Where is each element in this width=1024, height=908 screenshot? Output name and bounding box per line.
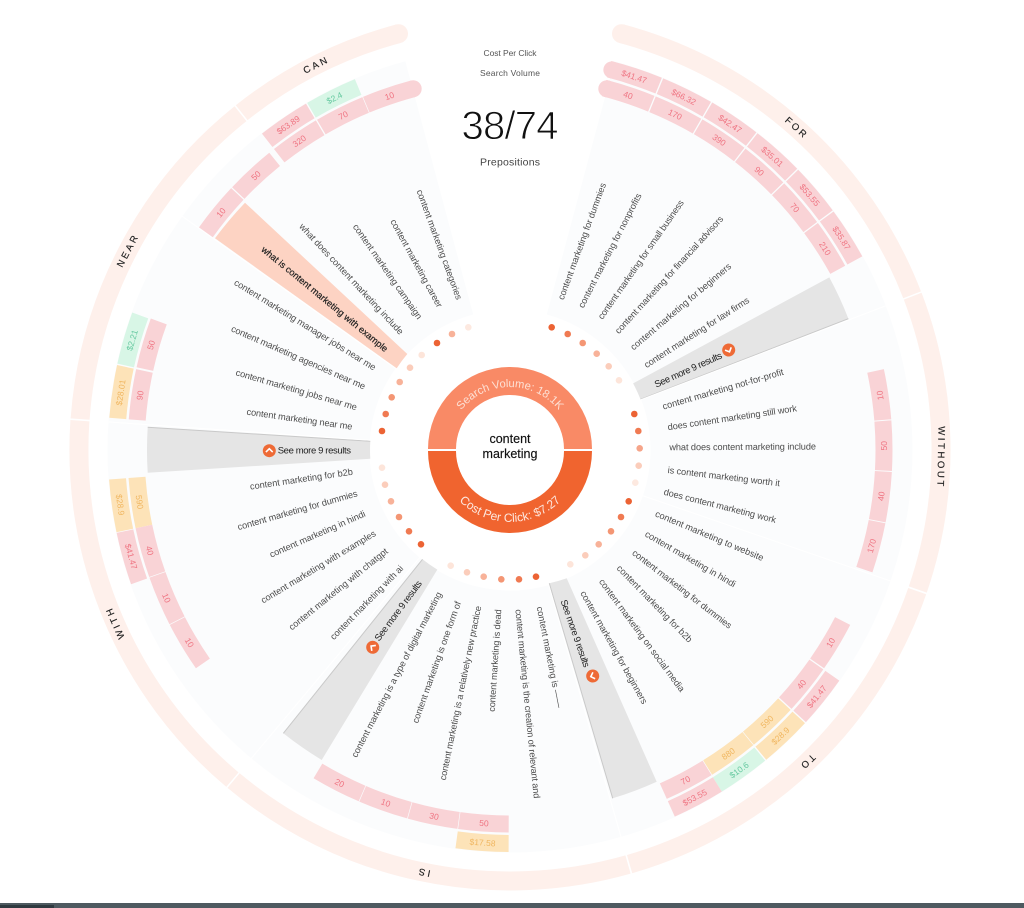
see more wedge: FOR [633,277,848,399]
keyword list: FOR: content marketing for law firms [642,295,751,370]
keyword list: IS: content marketing is —— [535,606,565,710]
ring label: WITHOUT: WITHOUT [934,426,946,489]
cost per click cells: TO: $28.9 [769,725,792,747]
keyword list: WITHOUT: is content marketing worth it [667,465,781,488]
cost per click cells: WITH: $28.9 [114,494,127,516]
keyword list: TO [578,509,765,706]
search volume cells: WITHOUT: 40 [876,491,887,502]
search volume cells: WITHOUT: 50 [879,441,889,451]
keyword list: NEAR: content marketing jobs near me [235,367,358,412]
search volume cells: CAN: 320 [291,133,308,149]
cost per click cell: IS [455,831,510,853]
keyword list: WITH: content marketing in hindi [268,509,367,560]
search volume cells: TO: 70 [679,773,692,787]
header: legend labels [480,48,540,78]
search volume cells: IS: 50 [479,818,489,828]
cost per click cells: TO: $53.55 [681,787,709,808]
cost per click cells: TO [667,670,840,817]
panel: NEAR preposition [80,114,396,440]
search volume cells: WITH: 10 [160,592,173,604]
search volume cells: TO: 880 [720,745,737,762]
keyword list: FOR [556,181,751,370]
panel: FOR preposition [546,24,912,400]
sector background: WITHOUT [641,306,913,581]
keyword list: WITH: content marketing for b2b [249,467,353,492]
keyword list: TO: content marketing for dummies [630,548,734,631]
cost per click cells: NEAR: $28.01 [114,379,128,406]
donut top half [428,367,592,449]
cost per click cells: WITH: $41.47 [123,543,140,571]
bottom bar [0,903,1024,908]
keyword list: WITH: content marketing with examples [259,528,378,605]
keyword list: FOR: content marketing for nonprofits [576,191,644,310]
search volume cells: WITH: 10 [183,636,196,649]
sector background: IS [251,557,621,853]
cost per click cells: FOR: $53.55 [797,182,822,208]
ring label: IS: IS [415,865,431,879]
keyword list: WITHOUT: content marketing not-for-profit [661,367,785,412]
ring label: NEAR: NEAR [115,232,142,269]
search volume cells: NEAR [128,318,167,422]
header: legend labels: Cost Per Click [484,48,537,58]
subtitle: Prepositions [480,156,540,168]
search volume cells: IS [313,763,510,833]
cost per click cells: FOR: $41.47 [620,68,648,86]
search volume cells: NEAR: 90 [134,390,146,401]
highlighted keyword wedge: what is content marketing with example [259,244,390,354]
keyword list: WITHOUT: does content marketing work [663,487,778,525]
cost per click cells: NEAR [108,312,149,420]
keyword list: IS [350,590,565,799]
keyword list: CAN: content marketing categories [415,188,464,301]
ring label: FOR: FOR [782,115,810,142]
keyword list: WITH: content marketing with ai [328,563,405,642]
keyword list: WITH: content marketing for dummies [236,488,359,532]
cost per click cell: IS: $17.58 [469,837,496,848]
search volume cells: FOR: 90 [752,164,766,178]
see more wedge: WITH [147,427,370,473]
keyword list: WITHOUT [661,367,816,525]
search volume cells: WITHOUT [856,369,893,573]
header: legend labels: Search Volume [480,68,540,78]
panel: IS preposition [234,557,628,881]
panel: TO preposition [549,496,917,864]
cost per click cells: TO: $10.6 [728,760,751,780]
search volume cells: FOR: 210 [817,240,833,257]
search volume cells: CAN: 70 [337,109,350,122]
keyword list: TO: content marketing for beginners [578,589,650,706]
search volume cells: TO: 590 [758,713,776,730]
keyword list: FOR: content marketing for small business [596,198,686,321]
search volume cells: WITH: 40 [144,545,156,557]
search volume cells: FOR [596,78,846,275]
see more wedge: FOR: See more 9 results [653,350,724,390]
search volume cells: WITHOUT: 170 [865,537,878,554]
keyword list: WITH [236,467,405,642]
search volume cells: WITHOUT: 10 [874,390,886,401]
outer ring arc: NEAR [80,114,240,419]
search volume cells: TO: 40 [795,677,808,691]
keyword list: TO: content marketing for b2b [615,563,694,644]
keyword list: TO: content marketing in hindi [643,529,738,589]
cost per click cells: CAN: $63.89 [275,113,302,136]
panel: CAN preposition [182,24,474,369]
outer ring arc: IS [234,781,628,881]
ring label: CAN: CAN [302,54,331,77]
cost per click cells: FOR: $35.87 [830,224,853,252]
keyword list: IS: content marketing is dead [487,609,503,712]
cost per click cells: CAN [261,78,362,148]
sector background: CAN [182,61,474,369]
cost per click cells: FOR: $35.01 [759,144,786,169]
see more wedge: TO [549,578,657,798]
sector background: WITH [107,422,420,759]
donut label: cost per click: Cost Per Click: $7.27 [460,495,558,522]
outer ring arc: TO [630,591,917,864]
keyword list: TO: content marketing to website [654,509,765,563]
keyword list: TO: content marketing on social media [597,577,687,694]
search volume cells: TO [659,616,851,800]
keyword list: CAN: content marketing career [388,218,444,309]
search volume cells: CAN: 50 [249,169,263,182]
search volume cells: FOR: 170 [667,107,684,122]
keyword list: IS: content marketing is the creation of relevant and [513,609,542,799]
highlighted keyword wedge [215,203,407,368]
see more wedge: IS [283,559,437,760]
see more wedge: WITH: See more 9 results [278,446,351,457]
search volume cells: FOR: 70 [788,201,802,215]
keyword list: WITHOUT: does content marketing still work [667,403,798,432]
keyword list: CAN: what does content marketing include [297,221,406,337]
donut bottom half [428,451,592,533]
cost per click cells: WITH [108,477,147,584]
keyword list: FOR: content marketing for dummies [556,181,608,301]
keyword list: CAN [297,188,464,337]
search volume cells: CAN: 10 [214,206,228,219]
ring label: TO: TO [796,751,817,772]
keyword list: NEAR: content marketing near me [246,407,353,432]
see more wedge: TO: See more 9 results [558,598,592,669]
search volume cells: CAN [198,78,424,238]
outer ring arc: FOR [612,24,912,295]
center donut: search volume and cost per click [428,367,592,533]
panel: WITH preposition [79,421,420,780]
keyword list: NEAR: content marketing manager jobs near me [232,277,378,372]
search volume cells: NEAR: 50 [145,339,157,351]
cost per click cells: NEAR: $2.21 [124,328,140,352]
keyword list: IS: content marketing is a relatively new practice [438,605,483,781]
search volume cells: IS: 10 [380,796,392,809]
center keyword: marketing [483,447,537,461]
outer ring arc: WITHOUT [913,296,941,590]
dot ring around the center [379,324,643,583]
outer ring arc: CAN [242,24,408,113]
search volume cells: IS: 30 [429,810,440,822]
title: preposition count: 38/74 [462,104,558,148]
cost per click cells: TO: $41.47 [805,683,829,710]
ring label: WITH: WITH [104,604,127,640]
keyword list: NEAR [230,277,378,432]
panel: WITHOUT preposition [641,296,946,590]
search volume cells: IS: 20 [333,776,346,790]
cost per click cells: CAN: $2.4 [325,90,344,106]
cost per click cells: FOR: $42.47 [716,112,744,135]
keyword list: WITH: content marketing with chatgpt [287,546,390,632]
sector background: TO [549,496,891,837]
search volume cells: WITH: 590 [134,494,146,510]
keyword list: FOR: content marketing for beginners [628,261,733,352]
search volume cells: TO: 10 [824,636,837,649]
outer ring arc: WITH [79,421,232,780]
sector background: NEAR [108,216,396,440]
see more wedge: IS: See more 9 results [373,579,425,644]
center keyword: content [489,432,531,446]
search volume cells: FOR: 40 [622,89,634,101]
cost per click cells: FOR [601,59,863,265]
search volume cells: FOR: 390 [710,132,728,148]
search volume cells: CAN: 10 [383,90,396,102]
donut label: search volume: Search Volume: 18.1K [456,379,564,410]
keyword list: FOR: content marketing for financial advisors [613,214,726,336]
keyword list: IS: content marketing is one form of [410,600,463,724]
keyword list: CAN: content marketing campaign [351,222,424,321]
keyword list: IS: content marketing is a type of digital marketing [350,590,444,759]
search volume cells: WITH [128,476,210,669]
keyword list: NEAR: content marketing agencies near me [230,324,367,391]
sector background: FOR [546,61,886,400]
keyword list: WITHOUT: what does content marketing include [668,442,816,452]
cost per click cells: FOR: $66.32 [670,87,698,107]
